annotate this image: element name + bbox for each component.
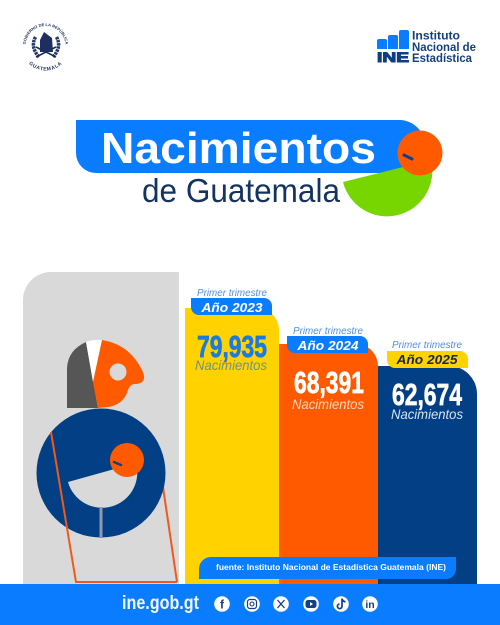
icon: linkedin: in: [365, 599, 375, 611]
label group: 2025: [387, 340, 468, 422]
icon: youtube: [303, 596, 319, 612]
illustration: orange frame right edge: [163, 487, 177, 582]
label group: 2024: Primer trimestre: [293, 326, 363, 337]
icon: INE bars: [377, 30, 409, 49]
icon: facebook: f: [220, 598, 225, 612]
illustration: navy dash: [114, 462, 121, 465]
label group: 2023: Año 2023: [200, 300, 263, 315]
title subheading: de Guatemala: [142, 172, 341, 209]
icon: facebook: [214, 596, 230, 612]
value: 68,391: 68,391: [294, 365, 364, 400]
title heading: Nacimientos: [101, 124, 376, 173]
icon: instagram: [244, 596, 260, 612]
institute name: Estadística: [412, 53, 473, 65]
panel: illustration: [23, 272, 179, 584]
institute name: Instituto: [412, 30, 460, 42]
tag: Año 2023: [191, 298, 272, 315]
label group: 2025: Primer trimestre: [392, 340, 462, 351]
label group: 2025: Nacimientos: [391, 406, 463, 422]
logo: Gobierno de la República de Guatemala: GUATEMALA: [30, 62, 62, 71]
website: ine.gob.gt: [122, 593, 200, 614]
label group: 2023: Nacimientos: [195, 357, 267, 373]
label group: 2023: Primer trimestre: [197, 288, 267, 299]
logo: Instituto Nacional de Estadística: [377, 30, 476, 65]
icon: X: [273, 596, 289, 612]
tag: Año 2024: [287, 336, 368, 353]
label group: 2024: Nacimientos: [292, 396, 364, 412]
logo: Gobierno de la República de Guatemala: GOBIERNO DE LA REPÚBLICA: [22, 23, 68, 44]
label group: 2023: [191, 288, 272, 373]
icon: orange circle head: [398, 130, 442, 176]
institute name: [412, 30, 476, 65]
value: 79,935: 79,935: [197, 329, 267, 364]
bar: 2023: [185, 308, 279, 584]
institute name: Nacional de: [412, 42, 476, 54]
bar: 2024: [279, 344, 378, 584]
source note: fuente: Instituto Nacional de Estadística Guatemala (INE): [216, 562, 446, 572]
gray background: [23, 272, 179, 584]
bar: 2025: [378, 366, 477, 584]
bar chart: births per year: [185, 288, 477, 584]
illustration: orange frame: [51, 432, 177, 582]
tag: Año 2025: [387, 351, 468, 368]
footer bar: [0, 584, 500, 625]
illustration: navy ring: [36, 408, 166, 538]
label group: 2025: Año 2025: [395, 352, 458, 367]
icon: green sector: [343, 160, 432, 216]
icon: linkedin: [362, 596, 378, 612]
title banner: [76, 120, 421, 173]
illustration: orange circle: [110, 443, 144, 477]
icon: tiktok: [333, 596, 349, 612]
value: 62,674: 62,674: [392, 377, 463, 412]
title: Nacimientos de Guatemala: [76, 120, 442, 216]
illustration: profile head: [67, 340, 144, 408]
logo: Gobierno de la República de Guatemala: [22, 23, 68, 71]
source note: [199, 557, 456, 579]
label group: 2024: [287, 326, 368, 412]
illustration: gray sector: [68, 463, 137, 508]
icon: navy eye dash: [404, 155, 412, 159]
illustration: vertical line: [100, 507, 102, 537]
INE wordmark: INE: [377, 49, 409, 65]
label group: 2024: Año 2024: [296, 338, 359, 353]
